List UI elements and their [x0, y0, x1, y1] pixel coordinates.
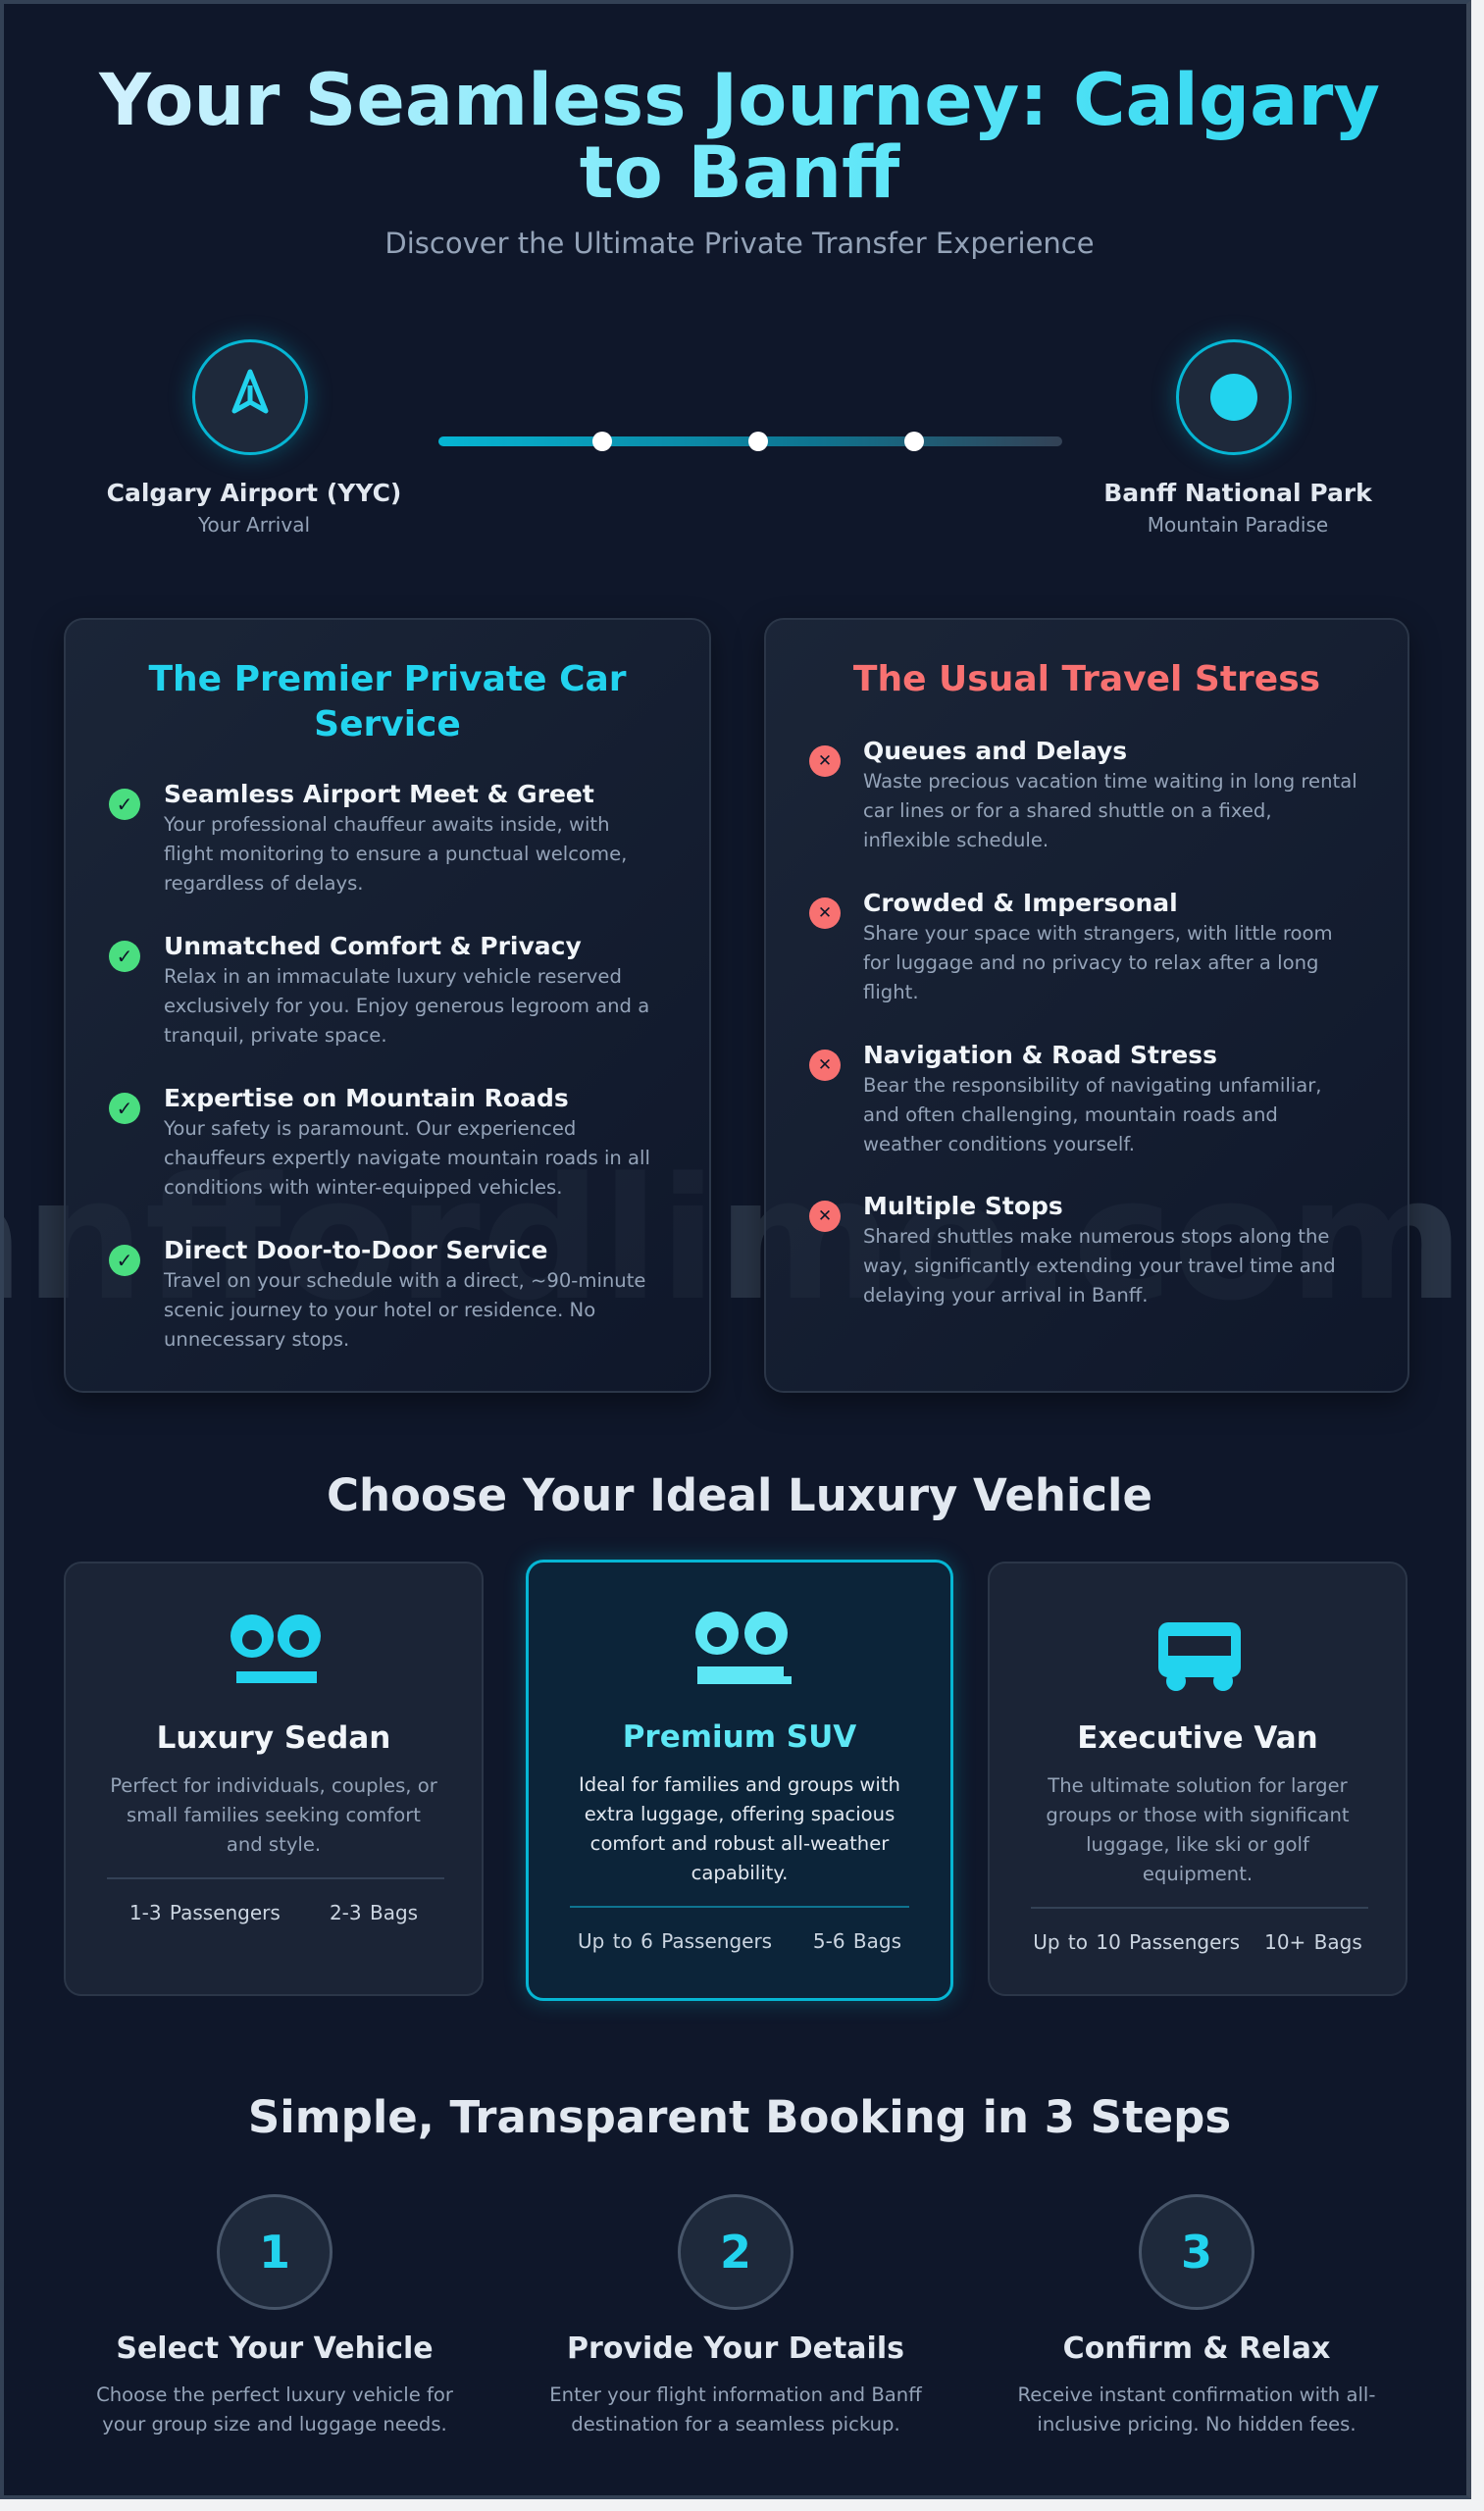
item 2: Relax in an immaculate luxury vehicle reserved [164, 965, 622, 988]
heading: The Usual Travel Stress [853, 659, 1320, 699]
item 2: Crowded & Impersonal [863, 889, 1178, 917]
item 1 [109, 780, 627, 895]
item 3: Expertise on Mountain Roads [164, 1084, 569, 1112]
item 1 [809, 737, 1357, 851]
card: executive van: Executive Van [1077, 1720, 1318, 1756]
card: luxury sedan [64, 1562, 484, 1996]
card: executive van: The ultimate solution for larger [1048, 1774, 1348, 1797]
item 1: Seamless Airport Meet & Greet [164, 780, 594, 808]
step 1: Choose the perfect luxury vehicle for [96, 2383, 453, 2406]
item 4: Multiple Stops [863, 1192, 1063, 1220]
item 2 [109, 932, 649, 1047]
label: Calgary: Calgary Airport (YYC) [107, 479, 401, 507]
heading: vehicles: Choose Your Ideal Luxury Vehicle [327, 1469, 1152, 1521]
icon: SUV [695, 1612, 792, 1684]
item 2 [809, 889, 1333, 1003]
item 1: Waste precious vacation time waiting in long rental [863, 770, 1357, 793]
panel: travel stress [764, 618, 1409, 1393]
card: executive van: groups or those with significant [1046, 1804, 1350, 1826]
item 3 [109, 1084, 650, 1199]
panel: premier service [64, 618, 711, 1393]
step 2: Provide Your Details [567, 2332, 904, 2366]
title: to Banff [580, 131, 899, 215]
card: premium SUV: Up to 6 Passengers 5-6 Bags [578, 1929, 901, 1953]
card: executive van [988, 1562, 1407, 1996]
item 3: weather conditions yourself. [863, 1133, 1135, 1155]
item 3: chauffeurs expertly navigate mountain roads in all [164, 1147, 650, 1169]
label: Banff [1103, 479, 1373, 537]
item 3: ✕ [818, 1055, 832, 1075]
card: executive van: luggage, like ski or golf [1086, 1833, 1309, 1856]
label: Calgary [107, 479, 401, 537]
item 4: ✓ [117, 1249, 132, 1272]
item 2: ✕ [818, 903, 832, 923]
icon: van [1158, 1622, 1241, 1691]
step 3: inclusive pricing. No hidden fees. [1037, 2413, 1356, 2435]
card: premium SUV: comfort and robust all-weather [590, 1832, 889, 1855]
step 3: Receive instant confirmation with all- [1018, 2383, 1375, 2406]
item 3: Bear the responsibility of navigating unfamiliar, [863, 1074, 1322, 1097]
label: Banff: Mountain Paradise [1148, 513, 1328, 537]
icon: sedan [230, 1614, 321, 1683]
card: executive van: Up to 10 Passengers 10+ Bags [1033, 1930, 1362, 1954]
heading: Service [314, 704, 461, 744]
item 4 [109, 1236, 645, 1351]
card: premium SUV: Premium SUV [623, 1719, 856, 1755]
step 2: Enter your flight information and Banff [549, 2383, 922, 2406]
item 2: Share your space with strangers, with little room [863, 922, 1333, 945]
card: premium SUV: Ideal for families and groups with [579, 1773, 900, 1796]
item 1: regardless of delays. [164, 872, 364, 895]
card: luxury sedan: 1-3 Passengers 2-3 Bags [129, 1901, 418, 1924]
card: luxury sedan: Perfect for individuals, couples, or [110, 1774, 437, 1797]
item 2: flight. [863, 981, 919, 1003]
item 1: ✕ [818, 751, 832, 771]
step 2 [549, 2194, 922, 2435]
step 3 [1018, 2194, 1375, 2435]
step 2: 2 [720, 2226, 751, 2279]
step 1: your group size and luggage needs. [102, 2413, 447, 2435]
item 3: Your safety is paramount. Our experienced [164, 1117, 576, 1140]
item 4: scenic journey to your hotel or residence. No [164, 1299, 595, 1321]
label: Banff: Banff National Park [1103, 479, 1372, 507]
item 2: ✓ [117, 945, 132, 968]
step 2: destination for a seamless pickup. [571, 2413, 900, 2435]
item 3: conditions with winter-equipped vehicles. [164, 1176, 563, 1199]
item 2: tranquil, private space. [164, 1024, 387, 1047]
icon: airport navigation [192, 339, 308, 455]
item 1: Queues and Delays [863, 737, 1127, 765]
item 3: ✓ [117, 1097, 132, 1120]
item 4: ✕ [818, 1206, 832, 1226]
item 1: car lines or for a shared shuttle on a fixed, [863, 799, 1272, 822]
subtitle: Discover the Ultimate Private Transfer Experience [384, 227, 1095, 260]
item 4: Shared shuttles make numerous stops along the [863, 1225, 1329, 1248]
item 4: way, significantly extending your travel time and [863, 1255, 1336, 1277]
step 1: 1 [259, 2226, 290, 2279]
item 1: ✓ [117, 793, 132, 816]
item 4: Direct Door-to-Door Service [164, 1236, 547, 1264]
item 1: inflexible schedule. [863, 829, 1049, 851]
progress bar [438, 436, 1062, 446]
step 1 [96, 2194, 453, 2435]
item 1: flight monitoring to ensure a punctual welcome, [164, 843, 627, 865]
item 3: and often challenging, mountain roads and [863, 1103, 1278, 1126]
card: executive van: equipment. [1143, 1863, 1253, 1885]
card: luxury sedan: small families seeking comfort [127, 1804, 421, 1826]
item 3 [809, 1041, 1322, 1155]
item 2: Unmatched Comfort & Privacy [164, 932, 582, 960]
title [4, 65, 1475, 210]
icon: destination [1176, 339, 1292, 455]
item 3: Navigation & Road Stress [863, 1041, 1217, 1069]
item 4 [809, 1192, 1336, 1307]
item 1: Your professional chauffeur awaits inside, with [164, 813, 610, 836]
heading [148, 659, 627, 744]
card: premium SUV [526, 1560, 953, 2001]
progress dots [592, 432, 924, 451]
item 2: for luggage and no privacy to relax after a long [863, 951, 1318, 974]
item 4: Travel on your schedule with a direct, ~90-minute [164, 1269, 645, 1292]
title: Your Seamless Journey: Calgary [99, 59, 1380, 142]
journey route [107, 330, 1373, 537]
label: Calgary: Your Arrival [198, 513, 310, 537]
item 4: unnecessary stops. [164, 1328, 349, 1351]
step 3: Confirm & Relax [1063, 2332, 1330, 2366]
card: premium SUV: extra luggage, offering spacious [585, 1803, 895, 1825]
heading: The Premier Private Car [148, 659, 627, 699]
card: luxury sedan: and style. [227, 1833, 321, 1856]
step 3: 3 [1181, 2226, 1212, 2279]
step 1: Select Your Vehicle [116, 2332, 434, 2366]
card: premium SUV: capability. [691, 1862, 788, 1884]
item 2: exclusively for you. Enjoy generous legroom and a [164, 995, 649, 1017]
card: luxury sedan: Luxury Sedan [157, 1720, 390, 1756]
item 4: delaying your arrival in Banff. [863, 1284, 1149, 1307]
heading: booking steps: Simple, Transparent Booking in 3 Steps [248, 2091, 1231, 2143]
